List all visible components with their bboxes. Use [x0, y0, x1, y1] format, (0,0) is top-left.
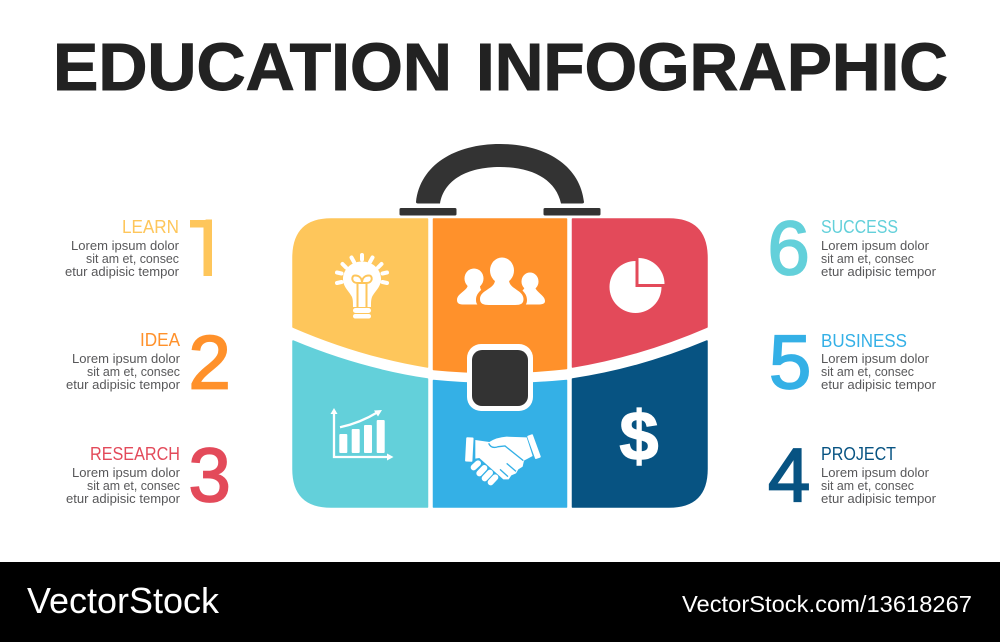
number 5: 5 [769, 320, 811, 406]
briefcase clasp [467, 344, 533, 411]
description: success: etur adipisic tempor [821, 264, 937, 279]
description: research: Lorem ipsum dolor [72, 465, 181, 480]
description: project: sit am et, consec [821, 478, 914, 493]
description: business: Lorem ipsum dolor [821, 351, 930, 366]
description: business [821, 351, 937, 392]
panel: learn [293, 219, 428, 367]
title: INFOGRAPHIC [476, 31, 948, 105]
description: learn: sit am et, consec [86, 251, 179, 266]
left item 1: learn [65, 216, 180, 279]
description: learn: etur adipisic tempor [65, 264, 180, 279]
description: success [821, 238, 937, 279]
description: project [821, 465, 937, 506]
icon: growth chart [330, 408, 394, 460]
footer image id: VectorStock.com/13618267 [682, 591, 972, 617]
description: idea: Lorem ipsum dolor [72, 351, 181, 366]
briefcase [293, 144, 707, 507]
description: business: sit am et, consec [821, 364, 914, 379]
footer brand: VectorStock [27, 580, 220, 621]
title [53, 31, 948, 105]
icon: pie chart [610, 258, 664, 313]
description: success: sit am et, consec [821, 251, 914, 266]
number 6: 6 [768, 206, 810, 292]
description: project: Lorem ipsum dolor [821, 465, 930, 480]
number 3: 3 [188, 434, 231, 518]
label: research: RESEARCH [90, 443, 180, 464]
panel: business [434, 380, 566, 507]
left item 2: idea [66, 329, 181, 392]
footer bar [0, 562, 1000, 642]
label: idea: IDEA [140, 329, 181, 350]
number 2: 2 [188, 320, 231, 406]
description: learn: Lorem ipsum dolor [71, 238, 180, 253]
number 1 [190, 220, 212, 276]
icon: dollar sign: $ [620, 397, 658, 475]
description: research: sit am et, consec [87, 478, 180, 493]
description: success: Lorem ipsum dolor [821, 238, 930, 253]
right item 4: project [821, 443, 937, 506]
label: project: PROJECT [821, 443, 896, 464]
right item 5: business [821, 330, 937, 392]
description: research: etur adipisic tempor [66, 491, 181, 506]
panel: success [293, 341, 428, 507]
panel: research [572, 219, 707, 367]
number 1: 1 [185, 203, 230, 293]
title: EDUCATION [53, 31, 452, 105]
description: business: etur adipisic tempor [821, 377, 937, 392]
description: idea: etur adipisic tempor [66, 377, 181, 392]
number 4: 4 [768, 434, 810, 518]
icon: handshake [465, 434, 541, 482]
right item 6: success [821, 216, 937, 279]
panel: idea [434, 219, 566, 373]
description: learn [65, 238, 180, 279]
label: success: SUCCESS [821, 216, 898, 237]
description: idea [66, 351, 181, 392]
description: research [66, 465, 181, 506]
label: business: BUSINESS [821, 330, 907, 351]
icon: people [457, 258, 545, 308]
briefcase handle [400, 144, 600, 216]
description: project: etur adipisic tempor [821, 491, 937, 506]
label: learn: LEARN [122, 216, 179, 237]
description: idea: sit am et, consec [87, 364, 180, 379]
icon: light bulb [337, 255, 387, 318]
panel: project [572, 341, 707, 507]
left item 3: research [66, 443, 181, 506]
